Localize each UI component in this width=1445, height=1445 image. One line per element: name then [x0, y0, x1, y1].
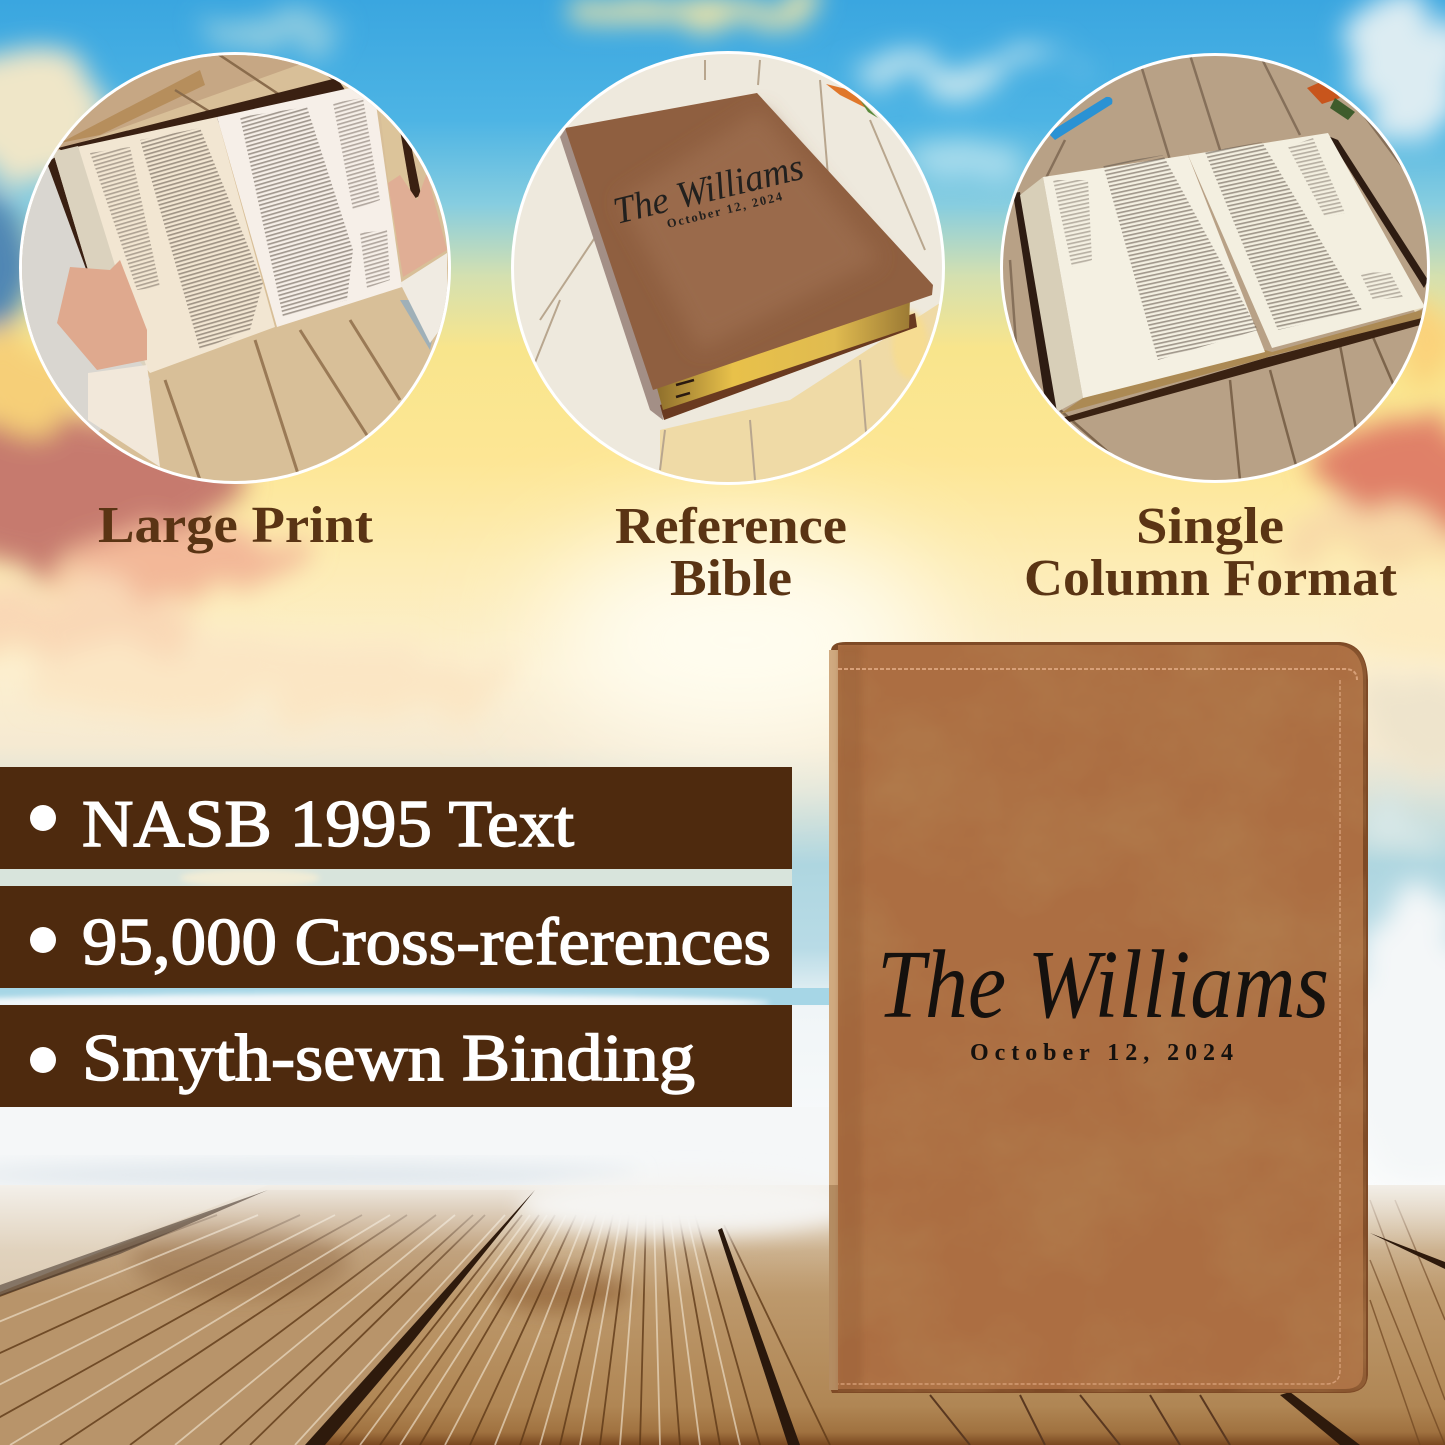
caption: large print: Large Print — [98, 497, 374, 554]
feature bar: NASB 1995 Text — [0, 767, 792, 869]
photo circle: single column format — [1000, 50, 1430, 490]
right page — [217, 83, 402, 327]
caption: reference bible — [615, 498, 847, 607]
plank cracks — [0, 1190, 268, 1296]
spine — [560, 128, 663, 420]
feature bar: Smyth-sewn Binding — [0, 1005, 792, 1107]
sleeves — [88, 365, 160, 467]
photo circle: reference bible: October 12, 2024 — [665, 189, 784, 231]
caption: reference bible: Bible — [670, 550, 792, 607]
photo circle: reference bible — [510, 50, 960, 490]
bottom cover and gold page edge — [660, 313, 917, 420]
engraved date: October 12, 2024 — [970, 1040, 1233, 1066]
feature bar: 95,000 Cross-references: 95,000 Cross-references — [82, 905, 771, 979]
engraved leather bible — [829, 642, 1368, 1393]
photo circle: reference bible: The Williams — [609, 146, 808, 233]
left page — [53, 117, 275, 373]
caption: single column format: Column Format — [1024, 550, 1398, 607]
page block — [1020, 177, 1083, 412]
right page — [1188, 133, 1425, 348]
wooden table — [0, 1175, 1445, 1445]
cover — [1013, 192, 1058, 412]
left page — [1043, 155, 1265, 398]
feature bar: NASB 1995 Text: NASB 1995 Text — [82, 787, 574, 861]
feature bar: Smyth-sewn Binding: Smyth-sewn Binding — [82, 1021, 695, 1095]
cover — [565, 93, 933, 390]
engraved name: The Williams — [877, 931, 1329, 1039]
caption: single column format — [1024, 498, 1398, 607]
caption: reference bible: Reference — [615, 498, 847, 555]
book cover — [58, 79, 344, 150]
caption: single column format: Single — [1136, 498, 1284, 555]
feature bar: 95,000 Cross-references — [0, 886, 792, 988]
photo circle: large print — [15, 50, 455, 490]
hands — [57, 260, 147, 370]
